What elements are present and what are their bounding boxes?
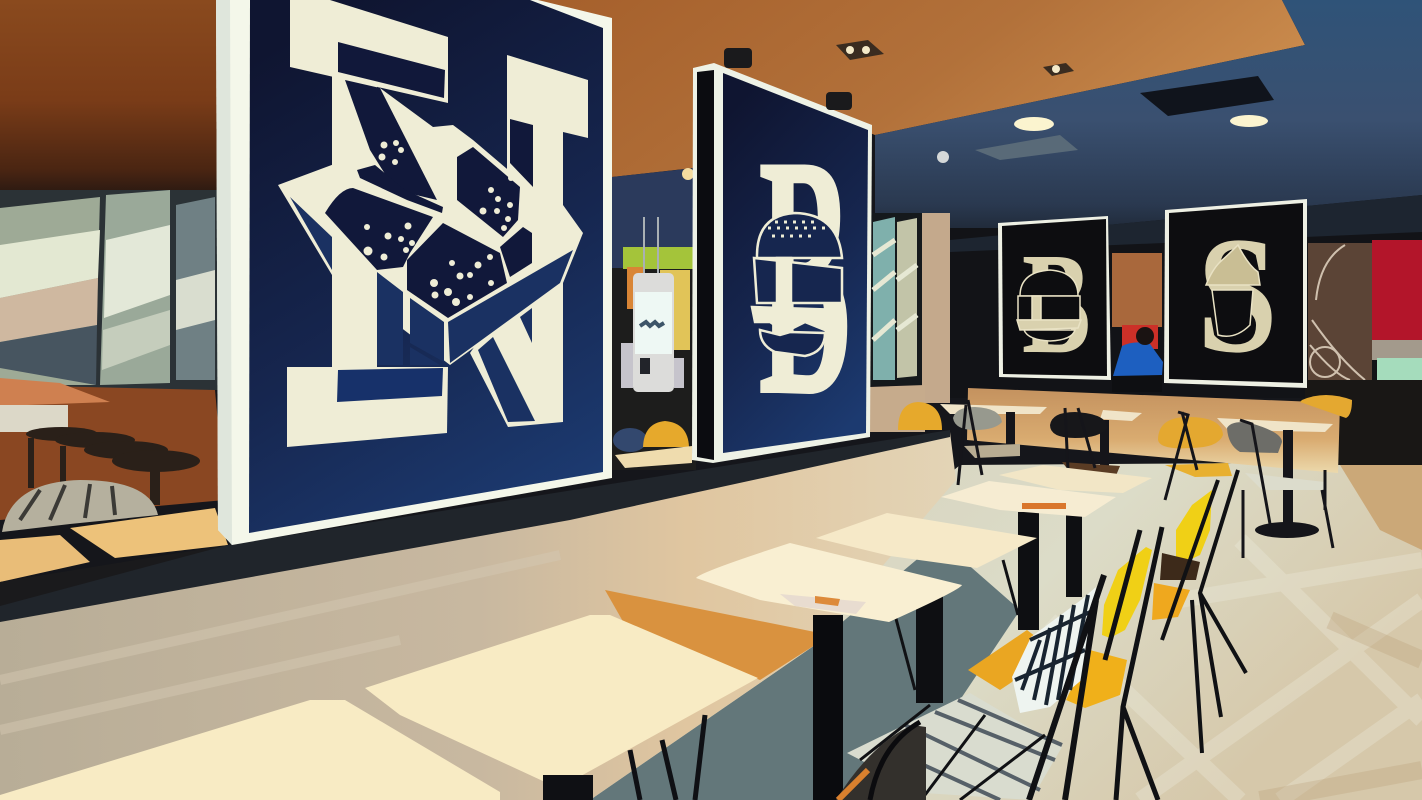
middle navy poster — [692, 63, 872, 469]
cup panels — [290, 197, 573, 422]
letters — [278, 0, 588, 447]
front chair — [836, 722, 926, 800]
table 5 — [0, 700, 500, 800]
ice cream — [1206, 245, 1260, 336]
window and wood column — [870, 213, 950, 432]
letter B: B — [758, 83, 851, 469]
floor — [560, 462, 1422, 800]
chair back row — [1152, 470, 1246, 753]
bench — [0, 430, 956, 800]
black poster S — [1164, 199, 1307, 388]
burger — [1017, 270, 1081, 341]
table 1 far — [941, 465, 1152, 630]
middle opening with kiosk — [612, 217, 696, 470]
distant tables — [940, 404, 1333, 432]
distant bench and furniture — [940, 388, 1352, 558]
sprinkles — [364, 140, 514, 306]
far back wall — [950, 195, 1422, 465]
seated person — [1112, 327, 1163, 392]
wood ceiling — [520, 0, 1305, 270]
burger — [752, 213, 842, 356]
ice cream scoops — [357, 165, 443, 213]
blue ceiling — [875, 0, 1422, 240]
kiosk — [621, 273, 684, 392]
striped chair — [847, 575, 1104, 800]
letter S: S — [1197, 203, 1278, 387]
table 4 — [365, 615, 758, 800]
left mirror area — [0, 0, 228, 608]
mirrored tables — [70, 508, 228, 558]
stained glass windows — [0, 190, 225, 390]
recessed spotlights in wood — [682, 40, 1074, 180]
distant chairs — [1158, 417, 1223, 448]
ceiling lights — [937, 115, 1268, 163]
table 2 — [816, 513, 1037, 703]
black poster B — [998, 216, 1111, 384]
stools — [26, 427, 200, 505]
ceiling poster mounts — [724, 48, 852, 110]
mirror wood wall — [0, 385, 225, 520]
large navy poster — [216, 0, 612, 545]
letter B: B — [1022, 224, 1091, 384]
right side chairs — [836, 470, 1246, 800]
table 3 — [696, 543, 962, 800]
chair yellow — [1066, 527, 1162, 800]
mirrored chair — [2, 480, 158, 532]
